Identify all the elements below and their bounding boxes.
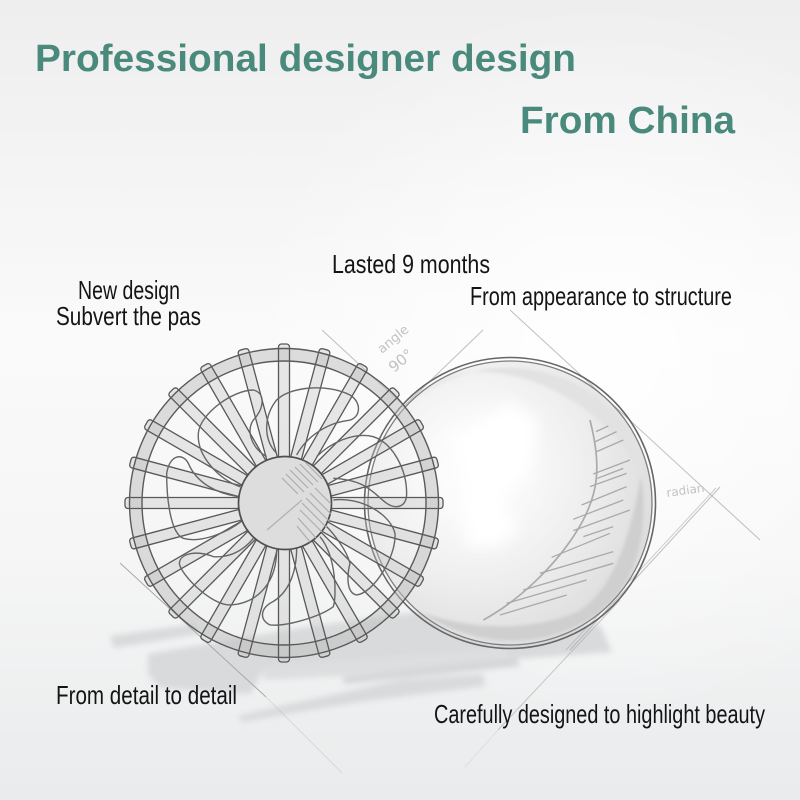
ball: transparent fan cover [364, 358, 656, 648]
hub [238, 456, 332, 550]
guard inner ring [142, 361, 426, 645]
spokes [125, 344, 443, 662]
hatching on cover [483, 420, 630, 620]
title line 2: From China [520, 100, 736, 142]
ground shadow strokes [110, 610, 612, 722]
guard ring band [136, 355, 432, 651]
caption: detail to detail: From detail to detail [56, 680, 237, 710]
cover inner rim [368, 361, 652, 645]
fan blades [167, 388, 407, 625]
title line 1: Professional designer design [35, 38, 576, 80]
guard outer ring [130, 348, 438, 658]
construction lines [120, 310, 760, 773]
annotation: 90 degrees: 90° [385, 345, 417, 376]
cover edge crescent [420, 475, 644, 641]
caption: subvert the past: Subvert the pas [56, 301, 201, 331]
hub hatching [267, 462, 331, 542]
cover rim [364, 358, 656, 648]
cover body [368, 361, 652, 645]
cover upper rim shading [410, 368, 638, 470]
cover highlight [450, 402, 538, 548]
annotation: angle: angle [375, 322, 412, 357]
caption: new design: New design [78, 275, 180, 305]
caption: lasted 9 months: Lasted 9 months [332, 249, 490, 279]
fan front: guard, blades and hub [125, 344, 443, 662]
annotation: radian: radian [665, 481, 705, 500]
